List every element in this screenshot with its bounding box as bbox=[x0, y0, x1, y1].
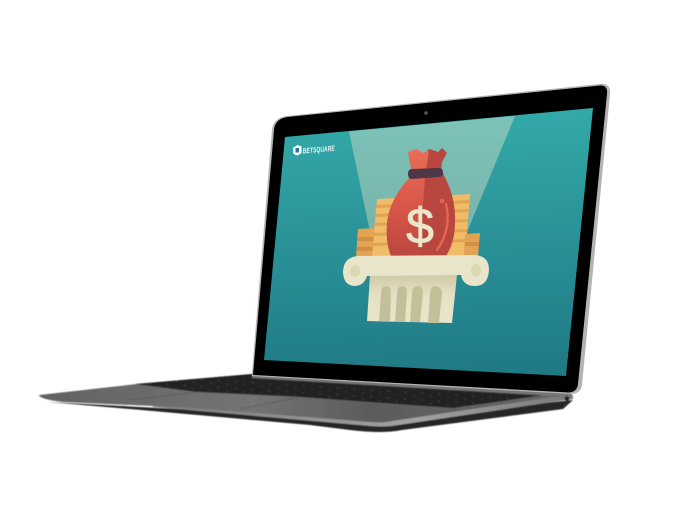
capital scroll bbox=[343, 255, 489, 286]
webcam bbox=[424, 111, 428, 115]
bag highlight bbox=[437, 204, 448, 250]
bag band bbox=[408, 168, 443, 179]
scroll eyes bbox=[350, 265, 360, 277]
front edge highlight bbox=[153, 396, 573, 426]
hinge strip bbox=[252, 375, 571, 396]
side port bbox=[565, 396, 569, 401]
right short stack bbox=[464, 233, 480, 256]
coin stacks bbox=[356, 194, 480, 257]
column flutes bbox=[379, 286, 442, 323]
screen bbox=[264, 108, 593, 376]
bag left side bbox=[387, 149, 429, 256]
logo bbox=[293, 144, 336, 156]
money bag bbox=[387, 148, 455, 256]
bag right side bbox=[418, 148, 455, 256]
laptop base bbox=[39, 374, 573, 432]
middle stack bbox=[372, 194, 470, 257]
dollar sign: $ bbox=[406, 198, 434, 254]
trackpad outline bbox=[130, 392, 300, 409]
logo text: BETSQUARE bbox=[302, 144, 336, 155]
base underside shadow bbox=[47, 400, 573, 432]
light beam bbox=[349, 116, 515, 232]
base deck bbox=[39, 374, 573, 425]
keyboard bbox=[135, 374, 552, 408]
logo mark bbox=[293, 145, 302, 156]
column capital bbox=[343, 255, 489, 323]
lid bezel bbox=[253, 85, 607, 392]
laptop lid bbox=[252, 84, 610, 394]
column shaft bbox=[367, 275, 457, 323]
left short stack bbox=[356, 228, 376, 257]
